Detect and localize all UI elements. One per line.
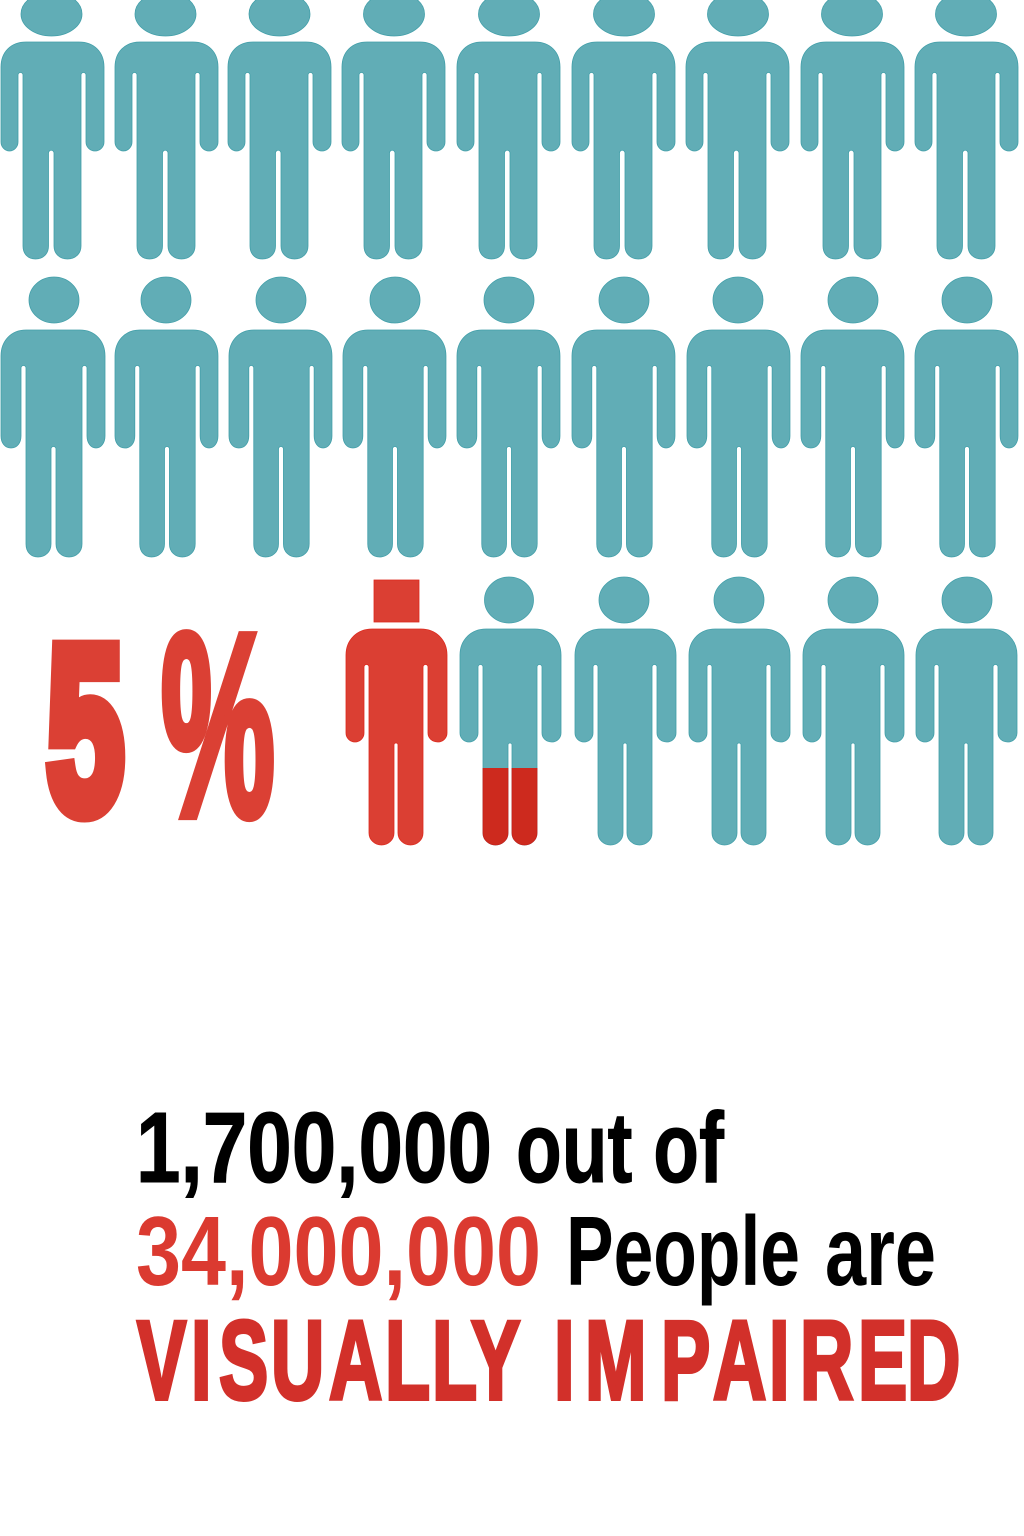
row 1 of people icons — [1, 0, 1018, 259]
statement line 2: People — [566, 1196, 800, 1306]
statement line 1: 1,700,000 — [136, 1092, 492, 1204]
partially red person — [460, 577, 561, 845]
statement line 2 — [136, 1196, 936, 1306]
statement line 2: are — [825, 1196, 936, 1306]
statement line 1: out of — [516, 1092, 725, 1204]
statement line 3 — [137, 1299, 960, 1424]
statement line 3: IMPAIRED — [554, 1299, 960, 1424]
statement line 3: VISUALLY — [137, 1299, 520, 1424]
statement line 2: 34,000,000 — [136, 1196, 541, 1306]
row 3 of remaining people icons — [575, 577, 1017, 845]
big percentage: 5%: % — [161, 582, 275, 871]
row 2 of people icons — [1, 277, 1018, 557]
big percentage: 5%: 5 — [47, 597, 124, 861]
big percentage: 5% — [47, 582, 275, 871]
red person with square head — [346, 580, 447, 845]
